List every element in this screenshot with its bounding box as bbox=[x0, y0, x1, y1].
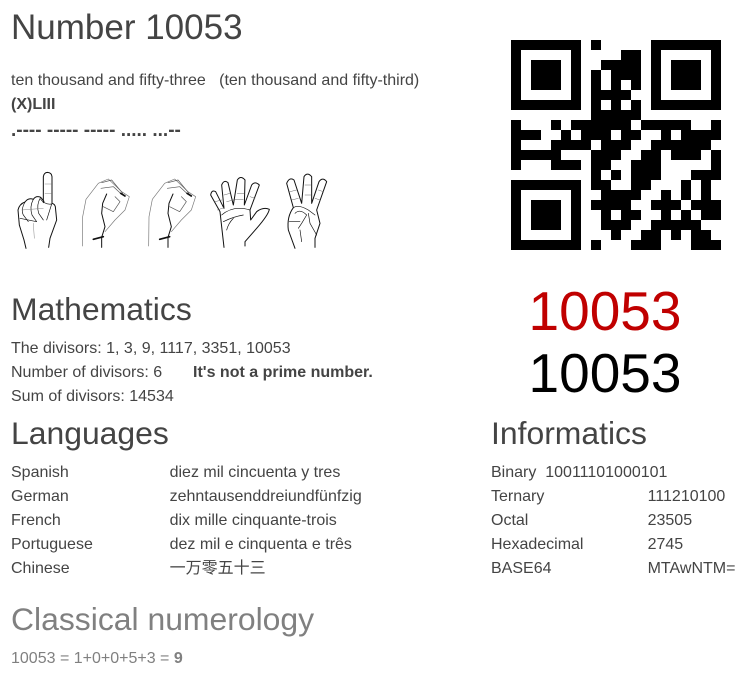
big number black: 10053 bbox=[529, 342, 681, 404]
Spanish bbox=[11, 464, 340, 481]
sign language hands bbox=[18, 172, 328, 249]
QR code bbox=[511, 40, 721, 250]
panel: mathematics bbox=[11, 340, 373, 405]
French: French bbox=[11, 512, 61, 529]
number in words: ten thousand and fifty-three (ten thousand and fifty-third) bbox=[11, 72, 419, 89]
panel: languages bbox=[11, 464, 362, 577]
hexadecimal: Hexadecimal bbox=[491, 536, 583, 553]
numerology formula: 10053 = 1+0+0+5+3 = 9 bbox=[11, 650, 183, 667]
heading: informatics: Informatics bbox=[491, 415, 647, 451]
icon: hand sign 5 bbox=[211, 178, 269, 247]
heading: languages: Languages bbox=[11, 415, 169, 451]
panel: informatics bbox=[491, 464, 735, 577]
Spanish: Spanish bbox=[11, 464, 69, 481]
German bbox=[11, 488, 362, 505]
number of divisors: Number of divisors: 6 bbox=[11, 364, 162, 381]
octal: Octal bbox=[491, 512, 528, 529]
morse code: .---- ----- ----- ..... ...-- bbox=[11, 120, 181, 141]
roman numeral: (X)LIII bbox=[11, 96, 55, 113]
German: German bbox=[11, 488, 69, 505]
ternary bbox=[491, 488, 725, 505]
octal: 23505 bbox=[648, 512, 692, 529]
binary: Binary 10011101000101 bbox=[491, 464, 667, 481]
sum of divisors: Sum of divisors: 14534 bbox=[11, 388, 174, 405]
icon: hand sign 3 bbox=[287, 174, 327, 248]
base64: MTAwNTM= bbox=[648, 560, 735, 577]
title: Number 10053 bbox=[11, 8, 243, 47]
octal bbox=[491, 512, 692, 529]
Portuguese: dez mil e cinquenta e três bbox=[170, 536, 352, 553]
icon: hand sign 1 bbox=[18, 172, 57, 248]
Portuguese bbox=[11, 536, 352, 553]
prime note: It's not a prime number. bbox=[193, 364, 373, 381]
hexadecimal: 2745 bbox=[648, 536, 683, 553]
base64: BASE64 bbox=[491, 560, 551, 577]
icon: hand sign 0 bbox=[82, 179, 129, 247]
base64 bbox=[491, 560, 735, 577]
French: dix mille cinquante-trois bbox=[170, 512, 337, 529]
ternary: Ternary bbox=[491, 488, 544, 505]
hexadecimal bbox=[491, 536, 683, 553]
big number red: 10053 bbox=[529, 280, 681, 342]
heading: classical numerology: Classical numerology bbox=[11, 601, 314, 637]
heading: mathematics: Mathematics bbox=[11, 291, 192, 327]
Portuguese: Portuguese bbox=[11, 536, 93, 553]
icon: hand sign 0 bbox=[149, 179, 196, 247]
French bbox=[11, 512, 337, 529]
Chinese: Chinese bbox=[11, 560, 70, 577]
Chinese: 一万零五十三 bbox=[170, 560, 266, 577]
Spanish: diez mil cincuenta y tres bbox=[170, 464, 340, 481]
German: zehntausenddreiundfünfzig bbox=[170, 488, 362, 505]
ternary: 111210100 bbox=[648, 488, 725, 505]
Chinese bbox=[11, 559, 266, 577]
divisors: The divisors: 1, 3, 9, 1117, 3351, 10053 bbox=[11, 340, 291, 357]
